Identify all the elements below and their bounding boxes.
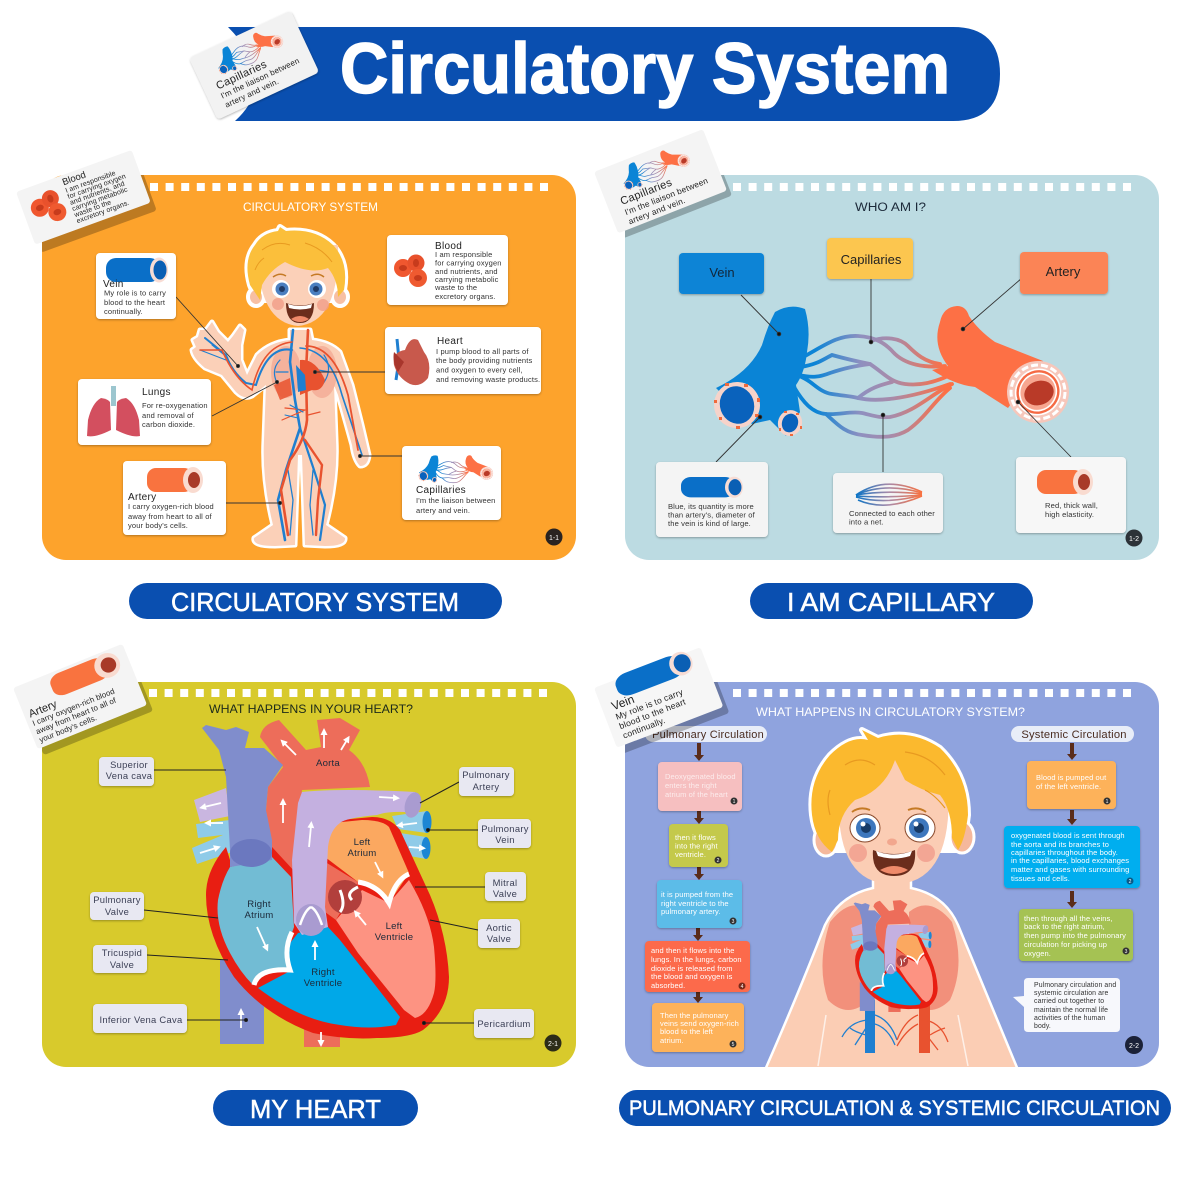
title card: capillaries (189, 11, 319, 120)
page badge (1126, 530, 1142, 546)
label: aortic valve: Valve (487, 933, 511, 944)
card: vein description: than artery's, diameter of (668, 510, 756, 520)
systemic step 1: orange box: 1 (1106, 799, 1109, 805)
step 5: orange box: Then the pulmonary (660, 1011, 729, 1020)
label: mitral valve (485, 872, 526, 901)
corner card: capillaries: Capillaries (619, 177, 674, 208)
header: systemic circulation (1011, 726, 1134, 742)
page badge (1125, 1036, 1143, 1054)
page badge: 2-2 (1129, 1043, 1139, 1050)
step 5: orange box: atrium. (660, 1036, 684, 1045)
panel background (625, 175, 1159, 560)
step 1: pink box: 1 (733, 799, 736, 805)
caption: I am capillary: I AM CAPILLARY (787, 587, 995, 617)
step 3: blue box: pulmonary artery. (661, 907, 720, 916)
card: capillaries description (833, 473, 943, 533)
label: mitral valve: Mitral (493, 877, 517, 888)
systemic step 1: orange box: of the left ventricle. (1036, 782, 1101, 791)
corner card: capillaries: artery and vein. (627, 195, 687, 226)
systemic step 3: green box: then pump into the pulmonary (1024, 931, 1126, 940)
label: mitral valve: Valve (493, 888, 517, 899)
boy with heart and lungs (765, 730, 1018, 1070)
card: artery: your body's cells. (128, 521, 188, 530)
systemic step 2: cyan box: oxygenated blood is sent through (1011, 831, 1125, 840)
step 4: red box: lungs. In the lungs, carbon (651, 955, 742, 964)
card: lungs: Lungs (142, 387, 171, 398)
card: heart: Heart (437, 336, 463, 347)
step 2: olive box: then it flows (675, 833, 716, 842)
step 3: blue box: 3 (732, 919, 735, 925)
card: lungs: carbon dioxide. (142, 420, 195, 429)
heart chamber names: Left (354, 837, 371, 848)
page badge: 1-2 (1129, 536, 1139, 543)
label: vein: Vein (709, 265, 735, 280)
systemic step 2: cyan box: tissues and cells. (1011, 874, 1070, 883)
card: heart: the body providing nutrients (436, 356, 532, 365)
card: artery (123, 461, 226, 535)
step 5: orange box: blood to the left (660, 1027, 714, 1036)
page badge (544, 1034, 562, 1052)
card: vein description: the vein is kind of large. (668, 519, 751, 528)
label: pulmonary vein: Vein (495, 834, 515, 845)
step 5: orange box (652, 1003, 744, 1052)
corner card: blood: waste to the (73, 199, 113, 219)
card: blood: waste to the (434, 283, 477, 292)
speech bubble: systemic circulation are (1034, 990, 1109, 997)
step 4: red box: and then it flows into the (651, 946, 734, 955)
label: pulmonary artery: Artery (473, 781, 499, 792)
corner card: blood: and nutrients, and (69, 181, 126, 207)
caption: circulatory system (129, 583, 502, 619)
label: capillaries (827, 238, 913, 279)
speech bubble (1013, 978, 1120, 1032)
label: pulmonary valve (90, 892, 144, 920)
label: pulmonary artery (459, 767, 514, 796)
card: heart: and oxygen to every cell, (436, 366, 523, 374)
heart chamber names: Atrium (348, 848, 376, 859)
corner card: blood: I am responsible (65, 170, 117, 195)
heart chamber names: Atrium (245, 910, 273, 921)
card: vein: blood to the heart (104, 298, 166, 307)
heart chamber names: Ventricle (304, 978, 342, 989)
card: artery: I carry oxygen-rich blood (128, 502, 214, 511)
step 2: olive box: into the right (675, 842, 718, 850)
step 4: red box: 4 (741, 984, 744, 990)
card: vein: continually. (104, 307, 143, 316)
label: superior vena cava: Vena cava (106, 770, 153, 781)
card: heart: I pump blood to all parts of (436, 347, 529, 356)
step 4: red box (645, 941, 750, 992)
label: superior vena cava: Superior (110, 759, 148, 770)
card: artery description (1016, 457, 1126, 533)
systemic step 3: green box (1019, 909, 1133, 961)
label: superior vena cava (99, 757, 154, 786)
systemic step 2: cyan box (1004, 826, 1140, 888)
corner card: vein: blood to the heart (618, 696, 687, 731)
step 1: pink box (658, 762, 742, 811)
card: capillaries: Capillaries (416, 485, 466, 496)
systemic step 3: green box: circulation for picking up (1024, 940, 1107, 949)
label: pulmonary valve: Valve (105, 906, 129, 917)
corner card: capillaries: I'm the liaison between (623, 175, 710, 217)
card: blood: carrying metabolic (435, 275, 499, 284)
caption: circulatory system: CIRCULATORY SYSTEM (171, 587, 459, 617)
label: aortic valve (478, 919, 520, 948)
label: artery: Artery (1046, 264, 1081, 279)
card: artery description: Red, thick wall, (1045, 501, 1098, 510)
systemic step 3: green box: then through all the veins, (1024, 914, 1113, 923)
step 1: pink box: enters the right (665, 781, 717, 790)
card: capillaries description: Connected to each other (849, 509, 935, 518)
step 3: blue box: right ventricle to the (661, 899, 729, 908)
corner card: artery (13, 644, 153, 755)
corner card: vein: Vein (609, 692, 636, 713)
panel: circulatory system (16, 150, 576, 560)
label: tricuspid valve: Tricuspid (102, 947, 142, 958)
step 1: pink box: Deoxygenated blood (665, 772, 736, 781)
step 5: orange box: veins send oxygen-rich (660, 1019, 739, 1028)
title pill (228, 27, 1000, 121)
speech bubble: body. (1034, 1023, 1051, 1030)
step 2: olive box: ventricle. (675, 850, 706, 859)
panel heading: WHO AM I? (855, 202, 926, 214)
heart chamber names: Ventricle (375, 932, 413, 943)
systemic step 2: cyan box: in the capillaries, blood exchanges (1011, 856, 1129, 865)
title card: capillaries: I'm the liaison between (219, 56, 301, 101)
panel background (42, 175, 576, 560)
panel: my heart (13, 644, 576, 1067)
corner card: vein: continually. (621, 715, 667, 740)
label: pericardium (474, 1009, 534, 1038)
corner card: blood: Blood (61, 169, 87, 188)
card: blood: and nutrients, and (435, 267, 498, 276)
leader lines (144, 770, 485, 1024)
corner card: artery: away from heart to all of (34, 695, 118, 736)
systemic step 2: cyan box: matter and gases with surrounding (1011, 865, 1129, 874)
step 4: red box: the blood and oxygen is (651, 972, 733, 981)
card: blood: I am responsible (435, 250, 492, 259)
systemic step 1: orange box: Blood is pumped out (1036, 773, 1107, 782)
corner card: artery: I carry oxygen-rich blood (31, 687, 116, 728)
systemic step 3: green box: 3 (1125, 949, 1128, 955)
title banner (189, 11, 1000, 121)
heart chamber names: Left (386, 921, 403, 932)
corner card: capillaries (594, 129, 732, 238)
step 2: olive box (669, 824, 728, 867)
label: inferior vena cava (93, 1004, 187, 1033)
boy with circulatory system (192, 227, 369, 546)
systemic step 2: cyan box: capillaries throughout the body. (1011, 848, 1118, 857)
systemic step 2: cyan box: 2 (1129, 879, 1132, 885)
label: pulmonary valve: Pulmonary (93, 894, 141, 905)
leader lines (176, 297, 403, 504)
leader lines (716, 278, 1071, 472)
flow arrows (693, 743, 1077, 1003)
label: pulmonary vein: Pulmonary (481, 823, 529, 834)
corner card: blood: carrying metabolic (71, 186, 129, 213)
speech bubble: maintain the normal life (1034, 1007, 1108, 1014)
card: vein: Vein (103, 279, 124, 290)
capillary network diagram (708, 306, 1079, 439)
speech bubble: Pulmonary circulation and (1034, 982, 1116, 989)
corner card: artery: your body's cells. (38, 713, 98, 745)
speech bubble: activities of the human (1034, 1015, 1105, 1022)
label: aortic valve: Aortic (486, 922, 512, 933)
caption: pulmonary and systemic circulation (619, 1090, 1171, 1126)
card: capillaries: I'm the liaison between (416, 496, 496, 505)
panel: who am I (594, 129, 1159, 560)
heart chamber names (245, 758, 413, 989)
header: pulmonary circulation (645, 726, 767, 742)
card: vein (96, 253, 176, 319)
card: lungs: and removal of (142, 411, 194, 420)
panel heading: WHAT HAPPENS IN YOUR HEART? (209, 702, 413, 716)
corner card: artery: Artery (27, 698, 59, 720)
caption: I am capillary (750, 583, 1033, 619)
heart diagram (192, 718, 449, 1047)
card: blood: for carrying oxygen (435, 258, 502, 268)
panel background (625, 682, 1159, 1067)
corner card: vein (593, 644, 729, 754)
systemic step 3: green box: oxygen. (1024, 949, 1051, 958)
card: blood (387, 235, 508, 305)
card: artery: away from heart to all of (128, 512, 213, 521)
card: capillaries: artery and vein. (416, 506, 470, 515)
step 3: blue box: it is pumped from the (661, 890, 733, 899)
corner card: blood: for carrying oxygen (67, 173, 127, 201)
panel: pulmonary and systemic circulation (593, 644, 1159, 1070)
step 2: olive box: 2 (717, 858, 720, 864)
label: inferior vena cava: Inferior Vena Cava (99, 1014, 183, 1025)
page badge: 2-1 (548, 1041, 558, 1048)
speech bubble: carried out together to (1034, 998, 1104, 1005)
corner card: blood: excretory organs. (76, 200, 131, 225)
card: vein description: Blue, its quantity is more (668, 502, 754, 511)
heart chamber names: Right (311, 967, 335, 978)
card: artery: Artery (128, 492, 156, 503)
panel heading: CIRCULATORY SYSTEM (243, 202, 378, 214)
card: capillaries description: into a net. (849, 518, 884, 526)
caption: my heart (213, 1090, 418, 1126)
step 4: red box: absorbed. (651, 981, 685, 990)
card: capillaries (402, 446, 501, 520)
card: blood: excretory organs. (435, 292, 496, 301)
panel background (42, 682, 576, 1067)
step 3: blue box (657, 880, 742, 928)
page badge: 1-1 (549, 535, 559, 542)
label: tricuspid valve: Valve (110, 959, 134, 970)
corner card: vein: My role is to carry (614, 687, 685, 722)
card: heart: and removing waste products. (436, 375, 540, 384)
label: artery (1020, 252, 1108, 294)
step 4: red box: dioxide is released from (651, 964, 733, 973)
caption: pulmonary and systemic circulation: PULMONARY CIRCULATION & SYSTEMIC CIRCULATION (629, 1097, 1160, 1120)
card: vein: My role is to carry (104, 288, 166, 298)
systemic step 2: cyan box: the aorta and its branches to (1011, 840, 1109, 849)
label: pulmonary artery: Pulmonary (462, 769, 510, 780)
title card: capillaries: Capillaries (214, 58, 269, 92)
corner card: blood (16, 150, 157, 253)
systemic step 3: green box: back to the right atrium, (1024, 922, 1105, 931)
header: systemic circulation: Systemic Circulation (1021, 729, 1127, 741)
label: pulmonary vein (478, 819, 531, 848)
title card: capillaries: artery and vein. (224, 77, 280, 110)
label: vein (679, 253, 764, 294)
label: tricuspid valve (93, 945, 147, 973)
heart chamber names: Right (247, 899, 271, 910)
label: pericardium: Pericardium (477, 1018, 531, 1029)
caption: my heart: MY HEART (250, 1094, 381, 1124)
card: vein description (656, 462, 768, 537)
card: blood: Blood (435, 241, 462, 252)
step 5: orange box: 5 (732, 1042, 735, 1048)
card: heart (385, 327, 541, 394)
card: artery description: high elasticity. (1045, 510, 1094, 519)
systemic step 1: orange box (1027, 761, 1116, 809)
card: lungs: For re-oxygenation (142, 401, 208, 410)
label: capillaries: Capillaries (841, 252, 902, 267)
page badge (546, 528, 562, 546)
panel heading: WHAT HAPPENS IN CIRCULATORY SYSTEM? (756, 705, 1025, 719)
flow arrows (200, 733, 421, 1042)
step 1: pink box: atrium of the heart (665, 790, 729, 799)
title text: Circulatory System (340, 30, 950, 109)
heart chamber names: Aorta (316, 758, 340, 769)
card: lungs (78, 379, 211, 445)
header: pulmonary circulation: Pulmonary Circulation (652, 729, 764, 741)
